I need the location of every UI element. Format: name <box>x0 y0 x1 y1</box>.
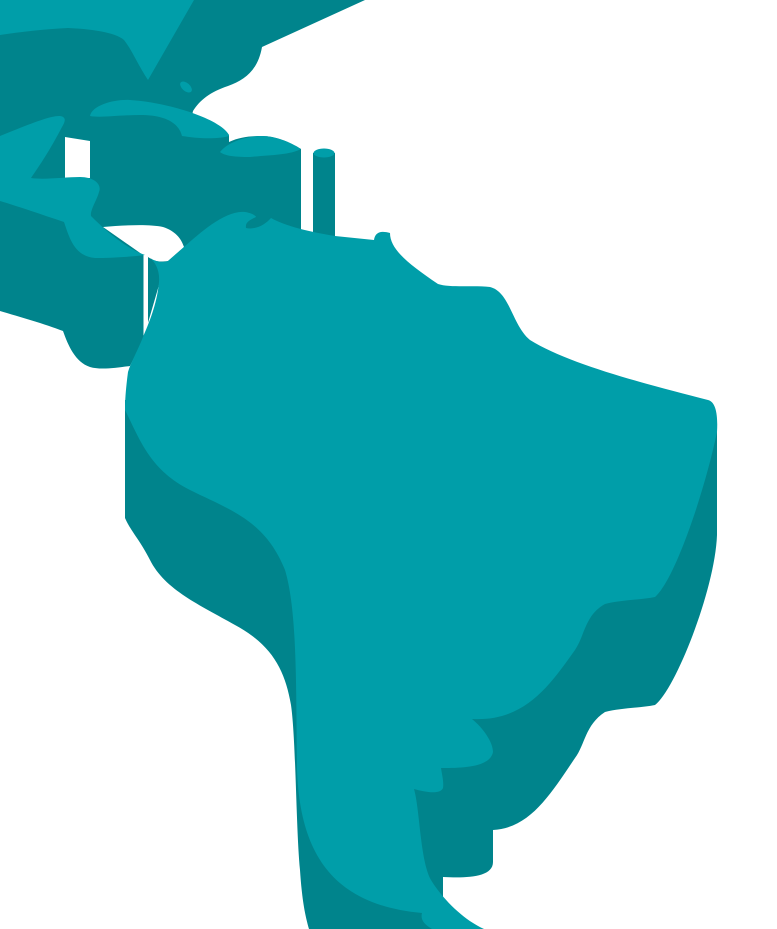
island: Puerto Rico <box>314 148 334 158</box>
island: Cuba <box>90 100 229 138</box>
landmass top: North America <box>0 0 194 80</box>
island: small cay <box>178 79 194 95</box>
island: Hispaniola <box>220 136 301 157</box>
extruded side: Central America and Caribbean <box>0 0 365 369</box>
landmass top: South America <box>125 212 717 929</box>
extruded side: South America <box>125 400 717 929</box>
gaps between landforms <box>65 137 184 338</box>
landmass top: Central America <box>0 116 145 258</box>
